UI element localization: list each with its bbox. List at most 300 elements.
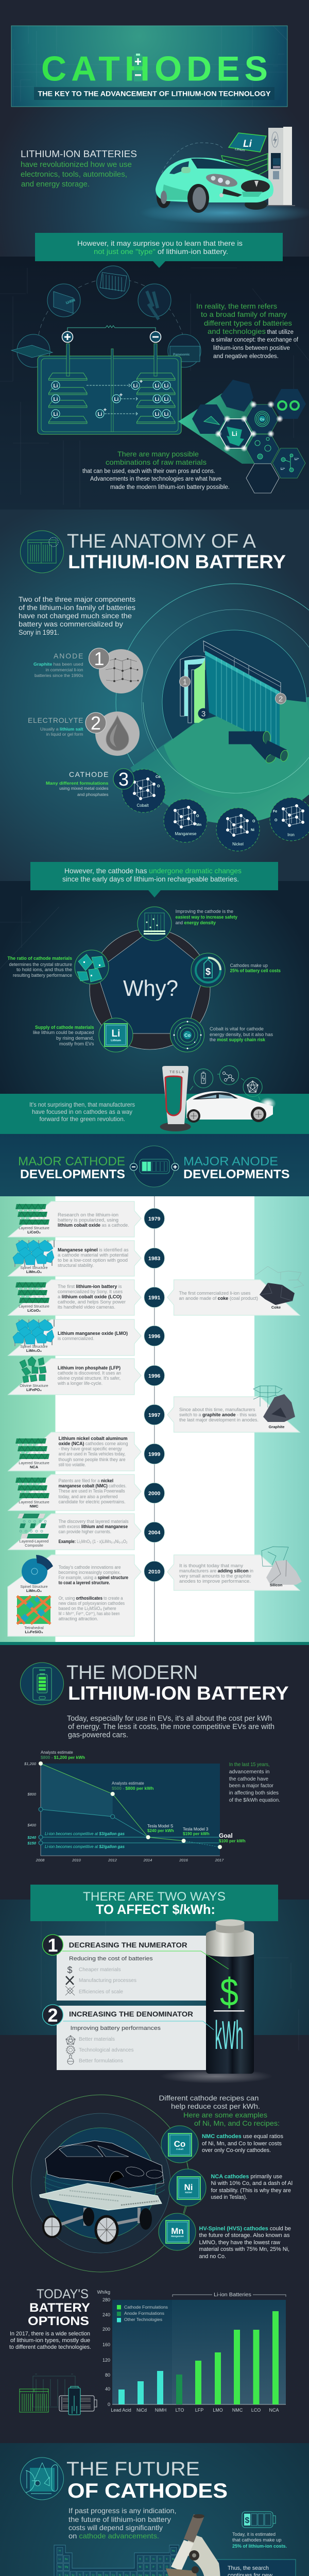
timeline card: 1996 LFP: olivine crystal structure. It's safer, — [58, 1376, 121, 1381]
timeline card: 2010 anode: anodes to improve performance. — [179, 1579, 251, 1584]
timeline card: 1996 LFP: Olivine Structure — [20, 1383, 48, 1388]
timeline card: 1996 LMO: Lithium manganese oxide (LMO) — [58, 1331, 128, 1336]
item: anode: ANODE — [54, 652, 83, 660]
timeline card: 2010 anode: very small amounts to the graphite — [179, 1573, 251, 1579]
timeline card: 1999 NCA: - they have great specific energy — [59, 1446, 122, 1451]
panel: increasing the denominator: Improving battery performances — [71, 2025, 161, 2031]
battery schematic: Li — [155, 383, 160, 389]
item: cathode: using mixed metal oxides — [59, 786, 108, 791]
timeline card: 1999 NCA: still too volatile. — [59, 1462, 86, 1467]
chart annotations: Li-ion becomes competitive at $2/gallon gas — [45, 1844, 125, 1849]
timeline card: 1996 LMO: LiMn₂O₄ — [26, 1348, 42, 1353]
chart x axis: LFP — [195, 2408, 203, 2413]
illustration: periodic table: C — [146, 2558, 148, 2561]
timeline card: 2010 cathode: becoming increasingly complex. — [59, 1570, 121, 1575]
panel: developments header: DEVELOPMENTS — [20, 1167, 125, 1181]
item: nickel: Nickel — [232, 842, 244, 846]
panel: green revolution band — [0, 1066, 309, 1134]
chart legend — [117, 2304, 168, 2323]
timeline card: 1996 LFP: LiFePO₄ — [26, 1387, 42, 1392]
timeline card: 1991 anode — [167, 1266, 304, 1315]
item: NCA cathodes: Nickel — [185, 2191, 192, 2194]
timeline years: 1983 — [148, 1256, 161, 1262]
panel: decreasing the numerator — [42, 1935, 229, 2001]
item: electrolyte: ELECTROLYTE — [28, 716, 83, 724]
icon: battery with dollar: $ — [245, 2516, 250, 2525]
chart x axis: Lead Acid — [111, 2408, 131, 2413]
chart x axis: NMC — [232, 2408, 243, 2413]
diagram: concentric circles and battery cutaway — [116, 584, 309, 824]
bars: cathode formulations — [195, 2311, 279, 2404]
illustration: periodic table: H — [59, 2550, 61, 2553]
illustration: periodic table: Ne — [172, 2558, 175, 2561]
timeline card: 1999 NCA: oxide (NCA) cathodes come along — [59, 1441, 128, 1446]
timeline card: 1983 — [8, 1240, 141, 1276]
timeline card: 1979: battery is popularized, using — [58, 1217, 118, 1223]
text: cost per kWh: gas-powered cars. — [68, 1731, 128, 1739]
heading: future of cathodes: OF CATHODES — [67, 2480, 228, 2502]
chart y axis — [97, 2290, 110, 2407]
battery pack — [39, 2183, 162, 2210]
icon: supercharger: TESLA — [169, 1071, 185, 1074]
text: cost per kWh: of energy. The less it costs, the more competitive EVs are with — [68, 1723, 274, 1731]
illustration: periodic table — [54, 2545, 179, 2576]
timeline years: 1991 — [148, 1295, 161, 1301]
text: why points: 25% of battery cell costs — [230, 968, 281, 974]
icon: lithium element circle — [99, 1018, 133, 1052]
chart axis labels: $1,200 — [24, 1761, 37, 1766]
illustration: car charging — [139, 127, 309, 224]
item: cathode: and phosphates — [77, 792, 108, 797]
item: anode — [33, 648, 143, 693]
text: combinations of raw materials: that can be used, each with their own pros and cons. — [82, 468, 215, 474]
panel: timeline — [0, 1196, 309, 1645]
chart y axis: 0 — [108, 2402, 110, 2407]
illustration: periodic table: Si — [146, 2566, 148, 2569]
icon: charging station — [247, 127, 295, 206]
text: different cathode recipes: Here are some examples — [183, 2111, 267, 2119]
battery schematic — [38, 326, 181, 434]
icon: supercharger — [160, 1066, 191, 1131]
text: broad family of batteries: a similar concept: the exchange of — [211, 337, 299, 343]
chart x axis — [111, 2408, 279, 2413]
chart y axis: 200 — [102, 2327, 110, 2332]
battery schematic: Li — [98, 412, 102, 417]
chart annotations: Analysts estimate — [41, 1750, 73, 1755]
electrode plates — [48, 373, 175, 423]
panel: increasing the denominator — [42, 2005, 214, 2070]
heading: battery options: TODAY'S — [37, 2287, 89, 2301]
text: two of three components: Two of the three major components — [19, 596, 135, 603]
timeline card: 1996 LFP: Lithium iron phosphate (LFP) — [58, 1365, 121, 1370]
icon: battery type circles — [11, 266, 201, 367]
timeline card: 1991 cathode: cathode, and helps Sony power — [58, 1299, 126, 1304]
timeline card: 1991 cathode: its handheld video cameras. — [58, 1304, 115, 1310]
timeline card: 1999 NCA: and are used in Tesla vehicles today, — [59, 1451, 126, 1456]
heading: modern battery: LITHIUM-ION BATTERY — [68, 1683, 289, 1704]
chart axis labels: 2017 — [215, 1858, 224, 1862]
text: why points: by rising demand, — [56, 1036, 94, 1041]
item: cathode: 3 — [118, 769, 129, 790]
hexagon material cluster: Li⁺ — [295, 457, 299, 461]
heading: battery options: of lithium-ion types, mostly due — [10, 2337, 90, 2344]
text: why points: energy density, but it also has — [210, 1032, 273, 1038]
chart y axis: 120 — [102, 2358, 110, 2363]
item: NMC cathodes: of Ni, Mn, and Co to lower costs — [202, 2141, 282, 2147]
illustration: periodic table: Mg — [65, 2566, 68, 2569]
text: why points: easiest way to increase safety — [176, 914, 238, 920]
panel: decreasing the numerator: Cheaper materials — [79, 1967, 121, 1973]
chart x axis: NiCd — [136, 2408, 147, 2413]
item: cathode: O — [157, 785, 160, 788]
timeline card: 2010 cathode: Spinel Structure — [20, 1584, 48, 1589]
item: electrolyte: 2 — [91, 713, 101, 734]
timeline card: 2010 cathode: Or, using orthosilicates to create a — [59, 1596, 123, 1601]
item: NMC cathodes: Co — [174, 2139, 185, 2149]
chart y axis: 160 — [102, 2342, 110, 2347]
text: broad family of batteries: different types of batteries — [204, 319, 292, 327]
icon: battery type circles: Panasonic — [173, 353, 190, 357]
panel: why background — [0, 881, 309, 1094]
timeline card: 1983: to be a low-cost option with good — [58, 1258, 128, 1263]
chart x axis: LTO — [176, 2408, 184, 2413]
timeline card: 1996 LFP: cathode is discovered. It uses an — [58, 1370, 121, 1376]
subtitle bar: THE KEY TO THE ADVANCEMENT OF LITHIUM-ION TECHNOLOGY — [38, 90, 271, 98]
battery schematic: Li — [164, 412, 169, 417]
item: HV-Spinel cathodes — [159, 2213, 291, 2260]
timeline card: 1991 cathode: commercialized by Sony. It uses — [58, 1289, 123, 1294]
timeline card: 2010 cathode: M = Mn²⁺, Fe²⁺, Co²⁺), has also been — [59, 1611, 120, 1616]
timeline card: 1997 anode: the last major development in anodes. — [179, 1417, 259, 1422]
text: why points: mostly from EVs — [59, 1041, 94, 1047]
item: HV-Spinel cathodes: HV-Spinel (HVS) cathodes could be — [199, 2226, 291, 2232]
text: past progress: If past progress is any indication, — [68, 2506, 176, 2515]
item: nickel — [216, 808, 260, 851]
callout: not just one type: not just one "type" of lithium-ion battery. — [94, 247, 228, 256]
timeline years: 1996 — [148, 1373, 161, 1379]
chart axis labels: 2014 — [143, 1858, 152, 1862]
text: different cathode recipes — [159, 2094, 280, 2127]
icon: battery charge — [130, 1146, 179, 1187]
chart annotations: $190 per kWh — [183, 1832, 210, 1836]
panel: future background — [0, 2443, 309, 2576]
illustration: microscope — [164, 2514, 220, 2576]
chart annotations: $800 - $1,200 per kWh — [41, 1755, 85, 1760]
chart annotations: Tesla Model S — [147, 1824, 173, 1828]
item: NMC cathodes: Cobalt — [176, 2148, 184, 2150]
text: why points: the most supply chain risk — [210, 1037, 266, 1043]
icon: gear — [66, 2045, 75, 2055]
item: iron: Fe — [273, 810, 277, 814]
chart annotations: $240 per kWh — [147, 1828, 174, 1833]
item: HV-Spinel cathodes: Manganese — [171, 2235, 184, 2238]
chart annotations: $100 per kWh — [219, 1839, 246, 1843]
timeline card: 1979: lithium cobalt oxide as a cathode. — [58, 1223, 129, 1228]
heading: battery options — [9, 2287, 91, 2350]
timeline card: 1999 NCA: though some people think they are — [59, 1457, 126, 1462]
text: broad family of batteries: and technologies — [208, 327, 266, 335]
item: NCA cathodes: Ni — [184, 2182, 193, 2192]
timeline card: 1996 LFP — [8, 1357, 141, 1395]
timeline card: 1996 LMO: Spinel Structure — [20, 1344, 48, 1349]
timeline card: 1979: Research on the lithium-ion — [58, 1212, 118, 1217]
panel: intro background — [0, 0, 309, 257]
icon: lithium sheets — [221, 133, 268, 178]
icon: cobalt atom circle — [170, 1018, 204, 1052]
chart y axis: 280 — [102, 2297, 110, 2302]
callout: two ways heading — [30, 1885, 278, 1921]
item: HV-Spinel cathodes: LMNO, they have the lowest raw — [199, 2240, 280, 2246]
timeline card: 1999 NCA: Lithium nickel cobalt aluminum — [59, 1436, 128, 1441]
callout: dramatic changes: However, the cathode has undergone dramatic changes — [64, 867, 242, 875]
item: cathode: Cobalt — [136, 803, 149, 808]
item: NCA cathodes: for stability. (This is why they are — [211, 2188, 291, 2194]
item: manganese — [164, 799, 207, 842]
timeline card: 2010 cathode: Li₂FeSiO₄ — [25, 1630, 43, 1634]
text: last 15 years: in affecting both sides — [229, 1790, 279, 1796]
text: last 15 years — [229, 1761, 280, 1803]
chart annotations: $500 - $800 per kWh — [112, 1786, 154, 1791]
item: manganese: Mn — [196, 823, 201, 827]
chart axis labels: $150 — [27, 1841, 37, 1845]
hexagon material cluster — [178, 380, 306, 493]
timeline card: 1997 anode — [167, 1386, 300, 1432]
bracket: li-ion batteries — [173, 2292, 286, 2298]
intro text: and energy storage. — [21, 180, 90, 189]
timeline card: 2000 NMC: Patents are filed for a nickel — [59, 1478, 113, 1483]
timeline card: 1996 LMO — [8, 1319, 141, 1355]
chart legend: Other Technologies — [124, 2317, 162, 2322]
timeline card: 2010 anode — [167, 1547, 302, 1590]
illustration: periodic table: Cl — [166, 2566, 168, 2569]
timeline card: 2004 composite: can provide higher currents. — [59, 1529, 111, 1534]
timeline card: 2010 cathode: to coat a layered structure. — [59, 1580, 110, 1585]
text: different cathode recipes: Different cathode recipes can — [159, 2094, 259, 2102]
text: two of three components: of the lithium-ion family of batteries — [19, 604, 135, 612]
text: different cathode recipes: help reduce cost per kWh. — [171, 2102, 260, 2110]
illustration: periodic table: Ar — [172, 2566, 175, 2569]
icon: scale cross — [65, 1986, 75, 1995]
chart axis labels: 2010 — [72, 1858, 81, 1862]
heading: why: Why? — [123, 976, 178, 1001]
text: why points: Supply of cathode materials — [35, 1025, 94, 1030]
panel: decreasing the numerator: 1 — [47, 1935, 58, 1956]
text: 25% of lithium-ion costs: that cathodes make up — [232, 2537, 281, 2543]
text: why points: Improving the cathode is the — [176, 909, 233, 914]
text: 25% of lithium-ion costs: Today, it is estimated — [232, 2532, 276, 2537]
timeline card: 1999 NCA: NCA — [30, 1465, 39, 1469]
panel: two ways teal band — [0, 1900, 309, 2035]
bars: other technologies — [118, 2371, 163, 2404]
text: broad family of batteries — [196, 302, 299, 360]
heading: future of cathodes — [66, 2459, 228, 2502]
timeline card: 1991 cathode — [8, 1280, 141, 1315]
item: nickel: O — [252, 820, 255, 823]
timeline card: 2010 cathode: Tetrahedral — [24, 1625, 44, 1630]
timeline card: 2010 cathode — [8, 1555, 141, 1636]
panel: green revolution band: have focused in on cathodes as a way — [32, 1108, 132, 1115]
timeline card: 2004 composite: The discovery that layered materials — [59, 1519, 129, 1524]
timeline years: 2010 — [148, 1569, 161, 1575]
bar: anode formulations — [176, 2375, 182, 2404]
wheels and axles — [43, 2208, 152, 2243]
battery schematic: Li — [155, 397, 160, 402]
item: NCA cathodes: NCA cathodes primarily use — [211, 2174, 282, 2180]
item: HV-Spinel cathodes: the future of storage. Also known as — [199, 2232, 290, 2239]
text: broad family of batteries: lithium-ions between positive — [213, 345, 290, 351]
item: HV-Spinel cathodes: Mn — [171, 2226, 184, 2236]
timeline card: 1997 anode: Since about this time, manufacturers — [179, 1407, 255, 1412]
icon: battery type circles: LI-ION — [66, 299, 76, 305]
text: two of three components — [19, 596, 135, 636]
battery cutaway: 1 — [183, 678, 187, 686]
illustration: periodic table: S — [159, 2566, 161, 2569]
heading: future of cathodes: THE FUTURE — [66, 2459, 200, 2480]
item: anode: Graphite has been used — [33, 662, 83, 667]
icon: battery, molecule and pentagon bubbles — [190, 1065, 262, 1100]
icon: price tag circle — [191, 953, 225, 987]
callout: two ways heading: TO AFFECT $/kWh: — [96, 1902, 215, 1917]
item: electrolyte: in liquid or gel form — [46, 732, 83, 737]
panel: increasing the denominator: Better formulations — [79, 2058, 123, 2064]
text: why points — [7, 909, 281, 1047]
hexagon material cluster: Li — [232, 430, 237, 437]
chart annotations — [41, 1750, 246, 1849]
heading: battery options: OPTIONS — [28, 2314, 89, 2328]
chart annotations: Goal — [219, 1832, 233, 1839]
timeline years: 1997 — [148, 1412, 161, 1418]
timeline card: 1991 anode: The first commercialized li-ion uses — [179, 1291, 251, 1296]
arrows: ion movement — [87, 384, 138, 415]
panel: increasing the denominator: INCREASING THE DENOMINATOR — [69, 2010, 193, 2018]
panel: blueprint background — [0, 257, 309, 510]
timeline card: 1991 cathode: a lithium cobalt oxide (LCO) — [58, 1294, 122, 1299]
chart axis labels: 2008 — [36, 1858, 45, 1862]
icon: lithium element circle: Lithium — [111, 1039, 121, 1042]
text: why points: determines the crystal structure — [9, 962, 72, 968]
text: why points: resulting battery performance — [13, 973, 72, 978]
heading: modern battery — [66, 1662, 289, 1704]
icon: pentagon — [66, 2036, 75, 2044]
timeline card: 2010 cathode: Today's cathode innovations are — [59, 1565, 121, 1570]
chart axis labels — [24, 1761, 224, 1862]
timeline card: 1997 anode: Graphite — [269, 1425, 284, 1429]
icon: negative terminal — [150, 332, 161, 342]
text: cost per kWh: Today, especially for use in EVs, it's all about the cost per kWh — [67, 1715, 272, 1723]
bar chart: energy density — [97, 2290, 286, 2413]
battery schematic: Li — [164, 383, 169, 389]
timeline card: 1979: Layered Structure — [19, 1226, 49, 1230]
timeline years — [144, 1208, 165, 1582]
item: cathode: CATHODE — [69, 770, 108, 778]
text: past progress: costs will depend significantly — [68, 2523, 163, 2532]
text: last 15 years: the cathode have — [229, 1776, 268, 1782]
illustration: car chassis and battery pack — [12, 2095, 190, 2272]
icon: blueprint tools — [21, 2458, 64, 2500]
text: last 15 years: of the $/kWh equation. — [229, 1797, 280, 1803]
icon: teal car — [156, 158, 273, 213]
icon: dollar: $ — [67, 1965, 73, 1975]
callout: two ways heading: THERE ARE TWO WAYS — [83, 1890, 226, 1904]
callout: dramatic changes — [30, 862, 278, 897]
text: last 15 years: been a major factor — [229, 1783, 273, 1789]
timeline card: 2004 composite: Layered-Layered — [20, 1539, 48, 1544]
chart y axis: 80 — [105, 2372, 110, 2378]
illustration: periodic table: Al — [139, 2566, 141, 2569]
item: NCA cathodes — [169, 2169, 293, 2206]
timeline card: 1991 cathode: The first lithium-ion battery is — [58, 1284, 122, 1289]
intro text — [21, 148, 137, 189]
intro text: have revolutionized how we use — [21, 161, 132, 169]
timeline card: 1979: LiCoO₂ — [27, 1230, 41, 1234]
item: HV-Spinel cathodes: and no Co. — [199, 2253, 226, 2260]
timeline card: 1983: LiMn₂O₄ — [26, 1269, 42, 1274]
panel: modern battery background — [0, 1642, 309, 2443]
timeline years: 1996 — [148, 1333, 161, 1340]
battery schematic: + — [140, 379, 143, 385]
illustration: periodic table: He — [172, 2550, 175, 2553]
item: nickel: Ni — [251, 828, 254, 832]
battery schematic: Li — [54, 397, 58, 402]
intro text: LITHIUM-ION BATTERIES — [21, 148, 137, 159]
timeline years: 2004 — [148, 1530, 161, 1536]
timeline card: 1996 LMO: is commercialized. — [58, 1336, 94, 1341]
callout: dramatic changes: since the early days of lithium-ion rechargeable batteries. — [62, 875, 239, 883]
battery schematic: Li — [164, 397, 169, 402]
panel: increasing the denominator: Technological advances — [79, 2047, 134, 2053]
panel: anatomy background — [0, 510, 309, 881]
heading: battery options: to different cathode technologies. — [9, 2344, 91, 2350]
item: anode: 1 — [94, 648, 105, 669]
text: two of three components: have not changed much since the — [19, 612, 132, 620]
icon: flask — [67, 2055, 74, 2064]
heading: modern battery: THE MODERN — [66, 1662, 198, 1684]
timeline card: 2010 cathode: LiMn₂O₄ — [26, 1588, 42, 1593]
timeline card: 1991 cathode: LiCoO₂ — [27, 1308, 41, 1313]
text: why points: Cobalt is vital for cathode — [210, 1026, 264, 1032]
text: why points: Cathodes make up — [230, 963, 268, 969]
text: last 15 years: In the last 15 years, — [229, 1761, 270, 1768]
panel: developments header — [0, 1134, 309, 1196]
item: manganese: O — [196, 815, 199, 818]
chart axis labels: 2012 — [108, 1858, 117, 1862]
item: HV-Spinel cathodes: material costs with 75% Mn, 25% Ni, — [199, 2246, 289, 2252]
bracket: li-ion batteries: Li-ion Batteries — [214, 2292, 251, 2298]
icon: anatomy heading battery — [21, 531, 64, 573]
icon: positive terminal — [62, 332, 73, 342]
text: combinations of raw materials: combinations of raw materials — [106, 458, 207, 466]
chart x axis: LCO — [251, 2408, 261, 2413]
timeline card: 2000 NMC: today, and are also a preferred — [59, 1494, 118, 1499]
timeline card: 2000 NMC: NMC — [29, 1504, 39, 1509]
text: past progress — [68, 2506, 176, 2540]
callout: not just one type — [35, 233, 283, 268]
battery schematic: Li — [133, 383, 138, 389]
subtitle bar — [34, 87, 274, 100]
illustration: kWh battery: kWh — [215, 2012, 244, 2058]
title text: CATHODES — [41, 49, 268, 89]
item: electrolyte — [28, 711, 140, 756]
battery schematic: + — [119, 392, 123, 398]
timeline card: 2010 cathode: new class of polyoxyanion cathodes — [59, 1601, 125, 1606]
item: NMC cathodes — [161, 2126, 284, 2213]
chart axis labels: $800 — [27, 1792, 37, 1797]
panel: search for new materials — [214, 2560, 296, 2576]
illustration: periodic table: N — [152, 2558, 154, 2561]
panel: increasing the denominator: Better materials — [79, 2037, 115, 2042]
timeline card: 1999 NCA — [8, 1432, 141, 1471]
text: past progress: the future of lithium-ion battery — [68, 2515, 171, 2523]
